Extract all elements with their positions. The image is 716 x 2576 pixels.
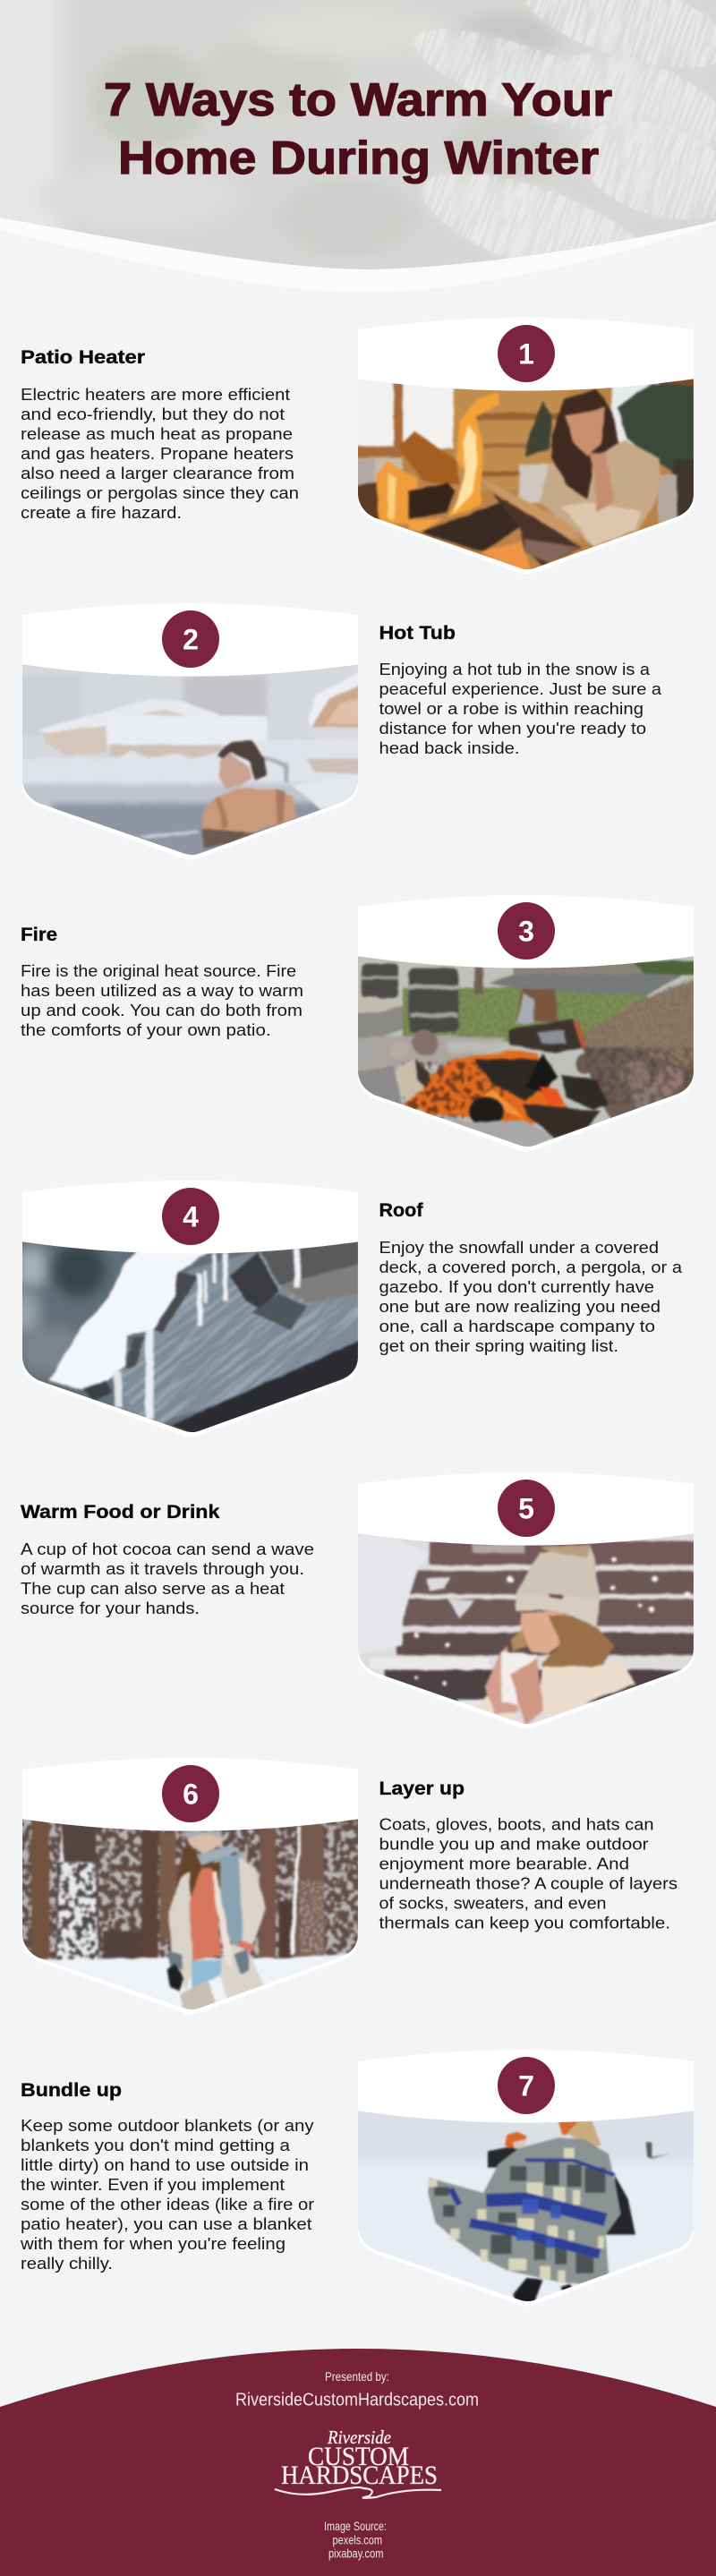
badge 3: 3 — [518, 916, 534, 948]
section 5: Warm Food or Drink text: source for your hands. — [21, 1599, 200, 1617]
section 3: Fire text: Fire — [21, 925, 57, 945]
section 6: Layer up text: of socks, sweaters, and even — [379, 1894, 607, 1912]
presented by: Presented by: — [325, 2369, 389, 2384]
section 2: Hot Tub text: towel or a robe is within reaching — [379, 700, 644, 718]
presented by: RiversideCustomHardscapes.com — [235, 2390, 479, 2410]
section 7: Bundle up text: blankets you don't mind getting a — [21, 2137, 291, 2154]
section 7: Bundle up text: Keep some outdoor blankets (or any — [21, 2117, 314, 2135]
section 2: photo card with number badge — [22, 603, 358, 859]
section 1: Patio Heater text: release as much heat as propane — [21, 425, 293, 443]
badge 1: 1 — [518, 338, 534, 371]
photo: woman walking in a snowy forest — [22, 1819, 358, 2010]
badge 7: 7 — [518, 2070, 534, 2103]
section 3: Fire text: Fire is the original heat source. Fire — [21, 962, 296, 980]
section 1: Patio Heater text: also need a larger clearance from — [21, 465, 294, 482]
logo: Riverside Custom Hardscapes: Riverside — [327, 2427, 391, 2448]
section 6: Layer up text: underneath those? A couple of layers — [379, 1874, 678, 1892]
section 6: photo card with number badge — [22, 1758, 358, 2014]
logo: Riverside Custom Hardscapes — [275, 2427, 441, 2498]
section 4: Roof text: gazebo. If you don't currently have — [379, 1278, 654, 1296]
badge 6: 6 — [183, 1778, 199, 1811]
section 4: Roof text: Enjoy the snowfall under a covered — [379, 1239, 659, 1257]
section 7: Bundle up text: really chilly. — [21, 2255, 113, 2273]
section 1: Patio Heater text — [21, 347, 299, 522]
title: 7 Ways to Warm Your — [104, 74, 612, 126]
section 3: Fire text: up and cook. You can do both from — [21, 1002, 303, 1019]
section 7: Bundle up text: Bundle up — [21, 2080, 122, 2101]
photo: outdoor campfire — [358, 956, 694, 1147]
section 6: Layer up text: Layer up — [379, 1778, 465, 1799]
section 3: Fire text — [21, 925, 303, 1039]
section 6: Layer up text: bundle you up and make outdoor — [379, 1835, 648, 1853]
section 1: Patio Heater text: and gas heaters. Propane heaters — [21, 445, 294, 463]
image sources — [324, 2520, 387, 2560]
section 3: Fire text: has been utilized as a way to warm — [21, 982, 303, 1000]
badge 3 — [498, 902, 555, 960]
section 4: Roof text: deck, a covered porch, a pergola, or a — [379, 1258, 683, 1276]
image sources: pexels.com — [333, 2533, 382, 2547]
section 7: photo card with number badge — [358, 2050, 694, 2306]
section 7: Bundle up text — [20, 2080, 314, 2273]
section 7: Bundle up text: some of the other ideas (like a fire or — [21, 2196, 314, 2213]
footer panel — [0, 2349, 716, 2576]
badge 1 — [498, 325, 555, 382]
section 7: Bundle up text: little dirty) on hand to use outside in — [21, 2156, 309, 2174]
photo: woman in hot tub — [22, 664, 358, 856]
section 2: Hot Tub text: distance for when you're ready to — [379, 720, 646, 738]
section 2: Hot Tub text: Hot Tub — [379, 623, 456, 644]
section 7: Bundle up text: patio heater), you can use a blanket — [21, 2215, 311, 2233]
photo: person wrapped in plaid blanket — [358, 2111, 694, 2302]
badge 4: 4 — [183, 1201, 199, 1233]
section 5: photo card with number badge — [358, 1472, 694, 1729]
section 5: Warm Food or Drink text: A cup of hot cocoa can send a wave — [21, 1540, 314, 1558]
badge 6 — [162, 1765, 219, 1822]
section 4: Roof text: Roof — [379, 1200, 424, 1221]
section 2: Hot Tub text: peaceful experience. Just be sure a — [379, 680, 662, 698]
section 1: Patio Heater text: create a fire hazard. — [21, 504, 182, 522]
section 7: Bundle up text: with them for when you're feeling — [20, 2235, 286, 2253]
section 1: Patio Heater text: ceilings or pergolas since they can — [21, 484, 299, 502]
section 5: Warm Food or Drink text: The cup can also serve as a heat — [21, 1580, 285, 1598]
badge 5: 5 — [518, 1493, 534, 1525]
image sources: pixabay.com — [328, 2547, 383, 2560]
section 2: Hot Tub text: Enjoying a hot tub in the snow is a — [379, 661, 651, 678]
photo: icicles on a snowy roof — [22, 1242, 358, 1432]
section 1: photo card with number badge — [358, 318, 694, 575]
section 3: photo card with number badge — [358, 895, 694, 1151]
section 5: Warm Food or Drink text — [21, 1502, 314, 1617]
badge 5 — [498, 1480, 555, 1537]
section 7: Bundle up text: the winter. Even if you implement — [21, 2176, 285, 2194]
section 6: Layer up text: thermals can keep you comfortable. — [379, 1914, 670, 1932]
header banner with snowy pine photo — [0, 0, 716, 307]
section 4: photo card with number badge — [22, 1181, 358, 1437]
section 5: Warm Food or Drink text: Warm Food or Drink — [21, 1502, 220, 1523]
section 2: Hot Tub text — [379, 623, 662, 757]
presented by — [235, 2369, 479, 2410]
section 1: Patio Heater text: and eco-friendly, but they do not — [21, 405, 285, 423]
section 6: Layer up text: enjoyment more bearable. And — [379, 1855, 629, 1872]
section 4: Roof text: one, call a hardscape company to — [379, 1318, 655, 1335]
badge 4 — [162, 1188, 219, 1245]
title: Home During Winter — [118, 132, 599, 184]
photo: woman by a fire — [358, 379, 694, 569]
section 6: Layer up text: Coats, gloves, boots, and hats can — [379, 1815, 653, 1833]
section 1: Patio Heater text: Electric heaters are more efficient — [21, 386, 290, 404]
badge 2: 2 — [183, 624, 199, 656]
section 4: Roof text: one but are now realizing you need — [379, 1298, 661, 1316]
photo: woman in knit hat with a cup — [358, 1534, 694, 1724]
title — [104, 74, 612, 184]
logo: Riverside Custom Hardscapes: HARDSCAPES — [281, 2461, 438, 2490]
image sources: Image Source: — [324, 2520, 387, 2533]
badge 7 — [498, 2057, 555, 2114]
section 4: Roof text — [379, 1200, 683, 1355]
section 5: Warm Food or Drink text: of warmth as it travels through you. — [21, 1560, 304, 1578]
section 4: Roof text: get on their spring waiting list. — [379, 1337, 618, 1355]
section 2: Hot Tub text: head back inside. — [379, 739, 519, 757]
section 6: Layer up text — [379, 1778, 678, 1932]
logo: Riverside Custom Hardscapes: CUSTOM — [308, 2442, 409, 2471]
section 1: Patio Heater text: Patio Heater — [21, 347, 145, 368]
section 3: Fire text: the comforts of your own patio. — [21, 1021, 270, 1039]
badge 2 — [162, 610, 219, 668]
